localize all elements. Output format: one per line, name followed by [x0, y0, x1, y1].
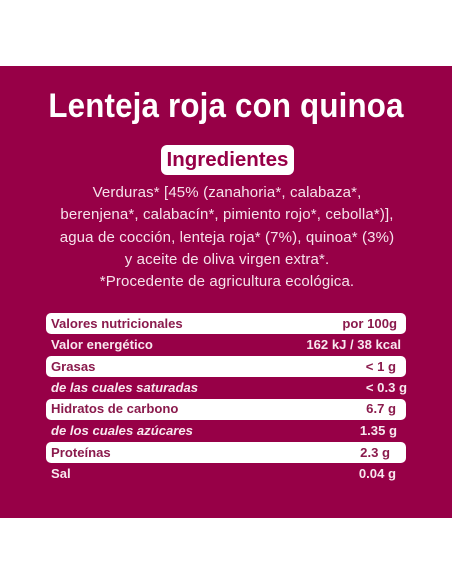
- text block: ingredients: y aceite de oliva virgen extra*.: [125, 251, 329, 268]
- text block: ingredients: berenjena*, calabacín*, pimiento rojo*, cebolla*)],: [60, 206, 394, 223]
- text block: ingredients: [60, 184, 394, 290]
- row: Proteínas: [51, 445, 390, 460]
- row: Valor energético: Valor energético: [51, 337, 153, 352]
- row: Hidratos de carbono: 6.7 g: [366, 401, 396, 416]
- row: Sal: [51, 466, 396, 481]
- row: Valor energético: [51, 337, 401, 352]
- row bar: Proteínas: [46, 442, 406, 463]
- row: Valores nutricionales: Valores nutricionales: [51, 316, 183, 331]
- row bar: Grasas: [46, 356, 406, 377]
- row: Grasas: < 1 g: [366, 359, 396, 374]
- row: Sal: Sal: [51, 466, 71, 481]
- row: de los cuales azúcares: 1.35 g: [360, 423, 397, 438]
- row: de los cuales azúcares: de los cuales azúcares: [51, 423, 193, 438]
- row: Valores nutricionales: [51, 316, 397, 331]
- row: de las cuales saturadas: < 0.3 g: [366, 380, 407, 395]
- text block: ingredients: *Procedente de agricultura ecológica.: [100, 273, 354, 290]
- row: Valores nutricionales: por 100g: [342, 316, 397, 331]
- row: de los cuales azúcares: [51, 423, 397, 438]
- row: Valor energético: 162 kJ / 38 kcal: [306, 337, 401, 352]
- row: de las cuales saturadas: de las cuales saturadas: [51, 380, 198, 395]
- row bar: header: [46, 313, 406, 334]
- row: Grasas: Grasas: [51, 359, 95, 374]
- panel: background: [0, 66, 452, 518]
- row: Proteínas: 2.3 g: [360, 445, 390, 460]
- row: de las cuales saturadas: [51, 380, 407, 395]
- row: Grasas: [51, 359, 396, 374]
- text block: ingredients: Verduras* [45% (zanahoria*, calabaza*,: [93, 184, 361, 201]
- text block: ingredients: agua de cocción, lenteja roja* (7%), quinoa* (3%): [60, 229, 394, 246]
- heading: Ingredientes: Ingredientes: [167, 148, 288, 171]
- row: Proteínas: Proteínas: [51, 445, 111, 460]
- title: Lenteja roja con quinoa: [48, 87, 403, 125]
- row: Sal: 0.04 g: [359, 466, 396, 481]
- row: Hidratos de carbono: Hidratos de carbono: [51, 401, 178, 416]
- row: Hidratos de carbono: [51, 401, 396, 416]
- row bar: Hidratos de carbono: [46, 399, 406, 420]
